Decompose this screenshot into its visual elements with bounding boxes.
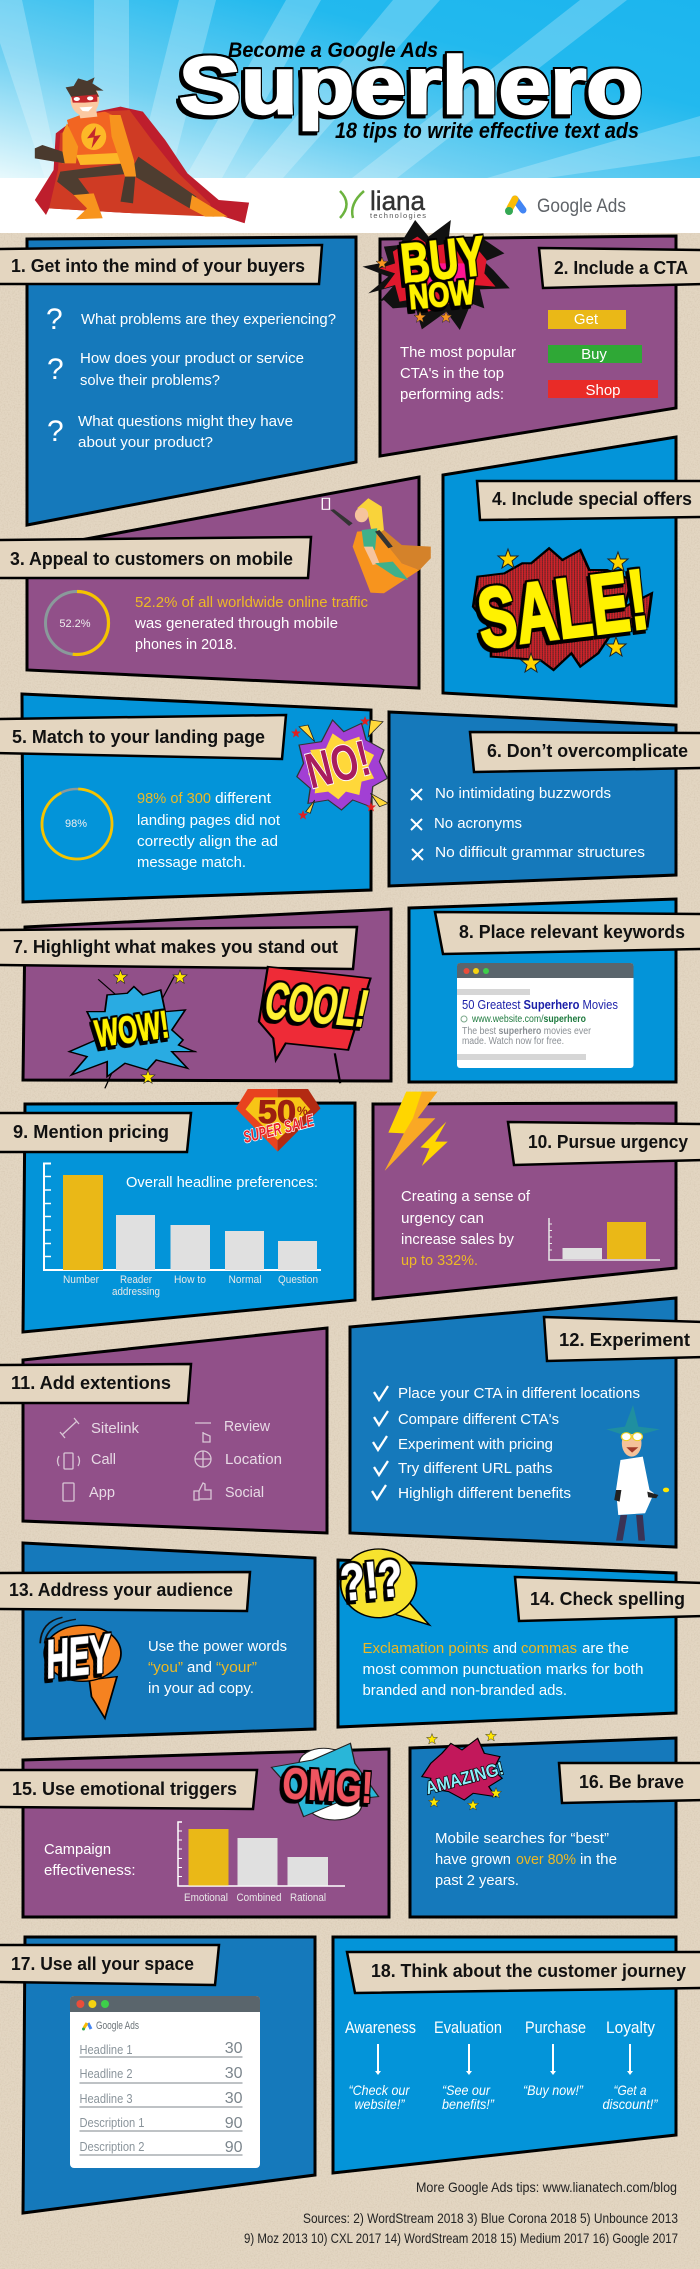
question list [78, 311, 336, 451]
icon: lightning bolts [385, 1092, 448, 1171]
button: Get [548, 310, 626, 329]
panel 5: landing page [0, 694, 388, 902]
mock Google Ads form window: Description 1 [80, 2115, 144, 2130]
heading 5: 5. Match to your landing page [12, 726, 265, 747]
campaign effectiveness label: Campaign [44, 1841, 111, 1858]
bar chart: headline preferences: How to [174, 1274, 206, 1286]
illustration: heroine taking a selfie [322, 498, 431, 593]
panel 16: be brave [410, 1730, 700, 1917]
mock Google Ads form window: 90 [225, 2139, 243, 2156]
list of things to avoid: No intimidating buzzwords [435, 785, 611, 802]
heading 16 [559, 1763, 700, 1803]
panel 14: check spelling [338, 1549, 700, 1727]
mock search result window [457, 963, 634, 1068]
footer: more tips link: More Google Ads tips: www.lianatech.com/blog [416, 2179, 677, 2195]
check marks [372, 1386, 388, 1499]
heading 13 [0, 1572, 250, 1611]
question marks: ? [47, 415, 64, 448]
logo: Liana Technologies: liana [370, 186, 426, 216]
journey quotes: “See our [442, 2082, 491, 2098]
question marks: ? [47, 353, 64, 386]
heading 1 [0, 245, 322, 284]
mock Google Ads form window: 90 [225, 2115, 243, 2132]
heading 3: 3. Appeal to customers on mobile [10, 548, 293, 569]
power words copy: in your ad copy. [148, 1680, 254, 1697]
mock Google Ads form window: Headline 3 [80, 2091, 132, 2106]
mobile searches statistic: over 80% [516, 1851, 576, 1868]
urgency statistic: Creating a sense of [401, 1188, 531, 1205]
landing page statistic: correctly align the ad [137, 833, 278, 850]
cross icons [411, 789, 423, 860]
panel 2: include a CTA [362, 220, 700, 456]
landing page statistic: different [215, 790, 272, 807]
heading 13: 13. Address your audience [9, 1579, 233, 1600]
bar chart: headline preferences: Reader [120, 1274, 152, 1286]
logo: Liana Technologies [340, 186, 426, 220]
mock Google Ads form window: 30 [225, 2065, 243, 2082]
mobile searches statistic: Mobile searches for “best” [435, 1830, 609, 1847]
logo: Liana Technologies: technologies [370, 211, 426, 220]
burst: BUY NOW [362, 220, 510, 330]
power words copy: Use the power words [148, 1638, 287, 1655]
panel 1: mind of your buyers [0, 237, 356, 525]
button: Shop: Shop [585, 382, 621, 399]
burst: OMG!: OMG! [281, 1759, 374, 1813]
title: kicker: Become a Google Ads [228, 39, 438, 62]
heading 2 [539, 248, 700, 288]
heading 2: 2. Include a CTA [554, 257, 688, 278]
bar chart: campaign effectiveness: Emotional [184, 1892, 228, 1904]
subtitle: 18 tips to write effective text ads [335, 118, 639, 143]
mock search result window: www.website.com/superhero [471, 1014, 586, 1025]
heading 12: 12. Experiment [559, 1329, 690, 1350]
badge: 50% super sale [236, 1089, 321, 1152]
speech bubble: HEY: HEY [43, 1623, 116, 1690]
panel 12: experiment [350, 1298, 700, 1547]
list of things to avoid: No acronyms [434, 815, 522, 832]
CTA intro text: The most popular [400, 344, 516, 361]
heading 15: 15. Use emotional triggers [12, 1778, 237, 1799]
mobile searches statistic: past 2 years. [435, 1872, 519, 1889]
mobile traffic statistic [134, 594, 368, 653]
question list: What problems are they experiencing? [81, 311, 336, 328]
burst: BUY NOW: NOW [407, 273, 477, 317]
mobile searches statistic [435, 1830, 617, 1889]
CTA intro text: CTA's in the top [400, 365, 504, 382]
button: Shop [548, 380, 658, 399]
bar chart: headline preferences: Number [63, 1274, 99, 1286]
header banner [0, 0, 700, 233]
journey quotes: “Check our [348, 2082, 411, 2098]
bar chart: headline preferences: Question [278, 1274, 318, 1286]
mock search result window: The best superhero movies ever [462, 1026, 592, 1037]
panel 18: customer journey [333, 1937, 700, 2173]
mock Google Ads form window [70, 1996, 260, 2168]
list of things to avoid [434, 785, 645, 861]
extension labels: App [89, 1484, 115, 1501]
burst: NO! [291, 716, 388, 820]
journey arrows [375, 2044, 633, 2075]
urgency statistic: urgency can [401, 1210, 484, 1227]
journey quotes [348, 2082, 659, 2112]
heading 9: 9. Mention pricing [13, 1121, 169, 1142]
punctuation statistic: branded and non-branded ads. [362, 1682, 567, 1699]
donut chart: 98% [41, 788, 113, 860]
burst: WOW! [69, 970, 196, 1088]
speech bubble: COOL! [259, 967, 371, 1083]
panel 7: stand out [0, 909, 391, 1088]
heading 8 [435, 912, 700, 954]
bar chart: headline preferences [44, 1164, 321, 1298]
campaign effectiveness label [44, 1841, 136, 1879]
extension labels: Review [224, 1418, 270, 1435]
CTA intro text: performing ads: [400, 386, 504, 403]
button: Buy [548, 345, 642, 363]
heading 7 [0, 927, 357, 969]
burst: OMG! [271, 1743, 379, 1820]
burst: AMAZING! [422, 1730, 506, 1810]
experiment checklist: Compare different CTA's [398, 1411, 559, 1428]
heading 9 [0, 1113, 191, 1152]
question marks: ? [46, 303, 63, 336]
power words copy: and [187, 1659, 212, 1676]
extension labels: Social [225, 1484, 264, 1501]
extension icons [58, 1418, 211, 1501]
punctuation statistic [362, 1640, 644, 1699]
speech bubble: ?!?: ?!? [338, 1549, 405, 1613]
heading 17: 17. Use all your space [11, 1953, 194, 1974]
heading 18 [347, 1952, 700, 1993]
landing page statistic: message match. [137, 854, 246, 871]
panel 3: customers on mobile [0, 477, 431, 688]
mock Google Ads form window: Google Ads [96, 2020, 139, 2032]
mobile traffic statistic: 52.2% of all worldwide online traffic [135, 594, 368, 611]
panel 6: don't overcomplicate [389, 712, 700, 886]
illustration: superhero character [35, 77, 249, 223]
bar chart: headline preferences: Overall headline preferences: [126, 1174, 318, 1191]
heading 10 [508, 1122, 700, 1165]
journey quotes: “Buy now!” [523, 2082, 584, 2098]
bar chart: headline preferences: addressing [112, 1286, 160, 1298]
mobile searches statistic: in the [580, 1851, 617, 1868]
urgency statistic: increase sales by [401, 1231, 514, 1248]
punctuation statistic: Exclamation points [362, 1640, 488, 1657]
journey stages: Evaluation [434, 2018, 502, 2037]
extension labels: Location [225, 1451, 282, 1468]
donut chart: 98%: 98% [65, 818, 87, 830]
heading 3 [0, 537, 311, 578]
question list: How does your product or service [80, 350, 304, 367]
question list: What questions might they have [78, 413, 293, 430]
experiment checklist: Experiment with pricing [398, 1436, 553, 1453]
landing page statistic [137, 790, 281, 871]
heading 7: 7. Highlight what makes you stand out [13, 936, 338, 957]
burst: WOW!: WOW! [92, 1004, 172, 1056]
question list: solve their problems? [80, 372, 220, 389]
panel 8: relevant keywords [409, 899, 700, 1082]
badge: 50% super sale: 50 [258, 1094, 296, 1130]
burst: BUY NOW: BUY [398, 223, 488, 295]
urgency statistic: up to 332%. [401, 1252, 478, 1269]
journey quotes: benefits!” [442, 2096, 495, 2112]
mock search result window: 50 Greatest Superhero Movies [462, 997, 618, 1012]
landing page statistic: landing pages did not [137, 812, 281, 829]
heading 4: 4. Include special offers [492, 488, 692, 509]
heading 14: 14. Check spelling [530, 1588, 685, 1609]
heading 6 [470, 732, 700, 772]
campaign effectiveness label: effectiveness: [44, 1862, 136, 1879]
footer: sources [244, 2210, 678, 2246]
heading 12 [544, 1317, 700, 1361]
mock Google Ads form window: 30 [225, 2040, 243, 2057]
bar chart: headline preferences: Normal [228, 1274, 262, 1286]
logo: Google Ads: Google Ads [537, 196, 626, 217]
question marks [46, 303, 64, 448]
punctuation statistic: commas [521, 1640, 577, 1657]
mobile searches statistic: have grown [435, 1851, 511, 1868]
heading 4 [477, 481, 700, 520]
journey stages: Awareness [345, 2018, 416, 2037]
panel 4: special offers [443, 437, 700, 706]
mock search result window: made. Watch now for free. [462, 1036, 564, 1047]
panel 15: emotional triggers [0, 1743, 389, 1917]
power words copy [148, 1638, 287, 1697]
punctuation statistic: are the [582, 1640, 629, 1657]
donut chart: 52.2%: 52.2% [59, 618, 91, 630]
panel 9: mention pricing [0, 1089, 355, 1332]
experiment checklist: Try different URL paths [398, 1460, 552, 1477]
list of things to avoid: No difficult grammar structures [435, 844, 645, 861]
panel 10: pursue urgency [373, 1092, 700, 1299]
heading 14 [515, 1577, 700, 1621]
speech bubble: HEY [40, 1617, 121, 1718]
experiment checklist [398, 1385, 640, 1502]
mobile traffic statistic: phones in 2018. [135, 636, 237, 653]
speech bubble: COOL!: COOL! [263, 972, 370, 1039]
burst: NO!: NO! [300, 730, 376, 799]
panel 11: add extensions [0, 1328, 327, 1533]
mobile traffic statistic: was generated through mobile [134, 615, 338, 632]
heading 8: 8. Place relevant keywords [459, 921, 685, 942]
bar chart: campaign effectiveness: Rational [290, 1892, 326, 1904]
bar chart: campaign effectiveness [178, 1822, 345, 1904]
journey quotes: “Get a [614, 2082, 647, 2098]
heading 5 [0, 715, 286, 759]
heading 15 [0, 1770, 257, 1809]
journey stages: Loyalty [606, 2018, 655, 2037]
panel 13: address your audience [0, 1543, 315, 1739]
heading 6: 6. Don’t overcomplicate [487, 740, 688, 761]
extension labels: Sitelink [91, 1420, 139, 1437]
badge: 50% super sale: SUPER SALE [241, 1111, 316, 1147]
logo: Google Ads [505, 196, 626, 217]
question list: about your product? [78, 434, 213, 451]
mock Google Ads form window: Description 2 [80, 2139, 144, 2154]
bar chart: campaign effectiveness: Combined [236, 1892, 282, 1904]
extension labels: Call [91, 1451, 116, 1468]
power words copy: “your” [216, 1659, 257, 1676]
heading 10: 10. Pursue urgency [528, 1131, 689, 1152]
illustration: scientist [606, 1405, 669, 1541]
urgency statistic [401, 1188, 531, 1269]
title: Superhero: Superhero [179, 41, 643, 131]
extension labels [89, 1418, 282, 1501]
CTA intro text [400, 344, 516, 403]
journey quotes: discount!” [602, 2096, 659, 2112]
badge: 50% super sale: % [297, 1104, 308, 1118]
panel 17: use all your space [0, 1937, 315, 2213]
button: Get: Get [574, 311, 599, 328]
journey stages: Purchase [525, 2018, 586, 2037]
journey quotes: website!” [354, 2096, 406, 2112]
mock Google Ads form window: Headline 1 [80, 2042, 132, 2057]
burst: AMAZING!: AMAZING! [423, 1758, 506, 1798]
heading 18: 18. Think about the customer journey [371, 1960, 687, 1981]
power words copy: “you” [148, 1659, 183, 1676]
landing page statistic: 98% of 300 [137, 790, 211, 807]
heading 16: 16. Be brave [579, 1771, 684, 1792]
punctuation statistic: most common punctuation marks for both [362, 1661, 644, 1678]
heading 17 [0, 1945, 219, 1985]
mock Google Ads form window: Headline 2 [80, 2066, 132, 2081]
heading 11 [0, 1364, 191, 1403]
bar chart: urgency [549, 1218, 660, 1260]
button: Buy: Buy [581, 346, 607, 363]
heading 1: 1. Get into the mind of your buyers [11, 255, 305, 276]
experiment checklist: Place your CTA in different locations [398, 1385, 640, 1402]
heading 11: 11. Add extentions [11, 1372, 171, 1393]
punctuation statistic: and [493, 1640, 517, 1657]
experiment checklist: Highligh different benefits [398, 1485, 571, 1502]
journey stages [345, 2018, 655, 2037]
donut chart: 52.2% [46, 592, 108, 654]
mock Google Ads form window: 30 [225, 2090, 243, 2107]
